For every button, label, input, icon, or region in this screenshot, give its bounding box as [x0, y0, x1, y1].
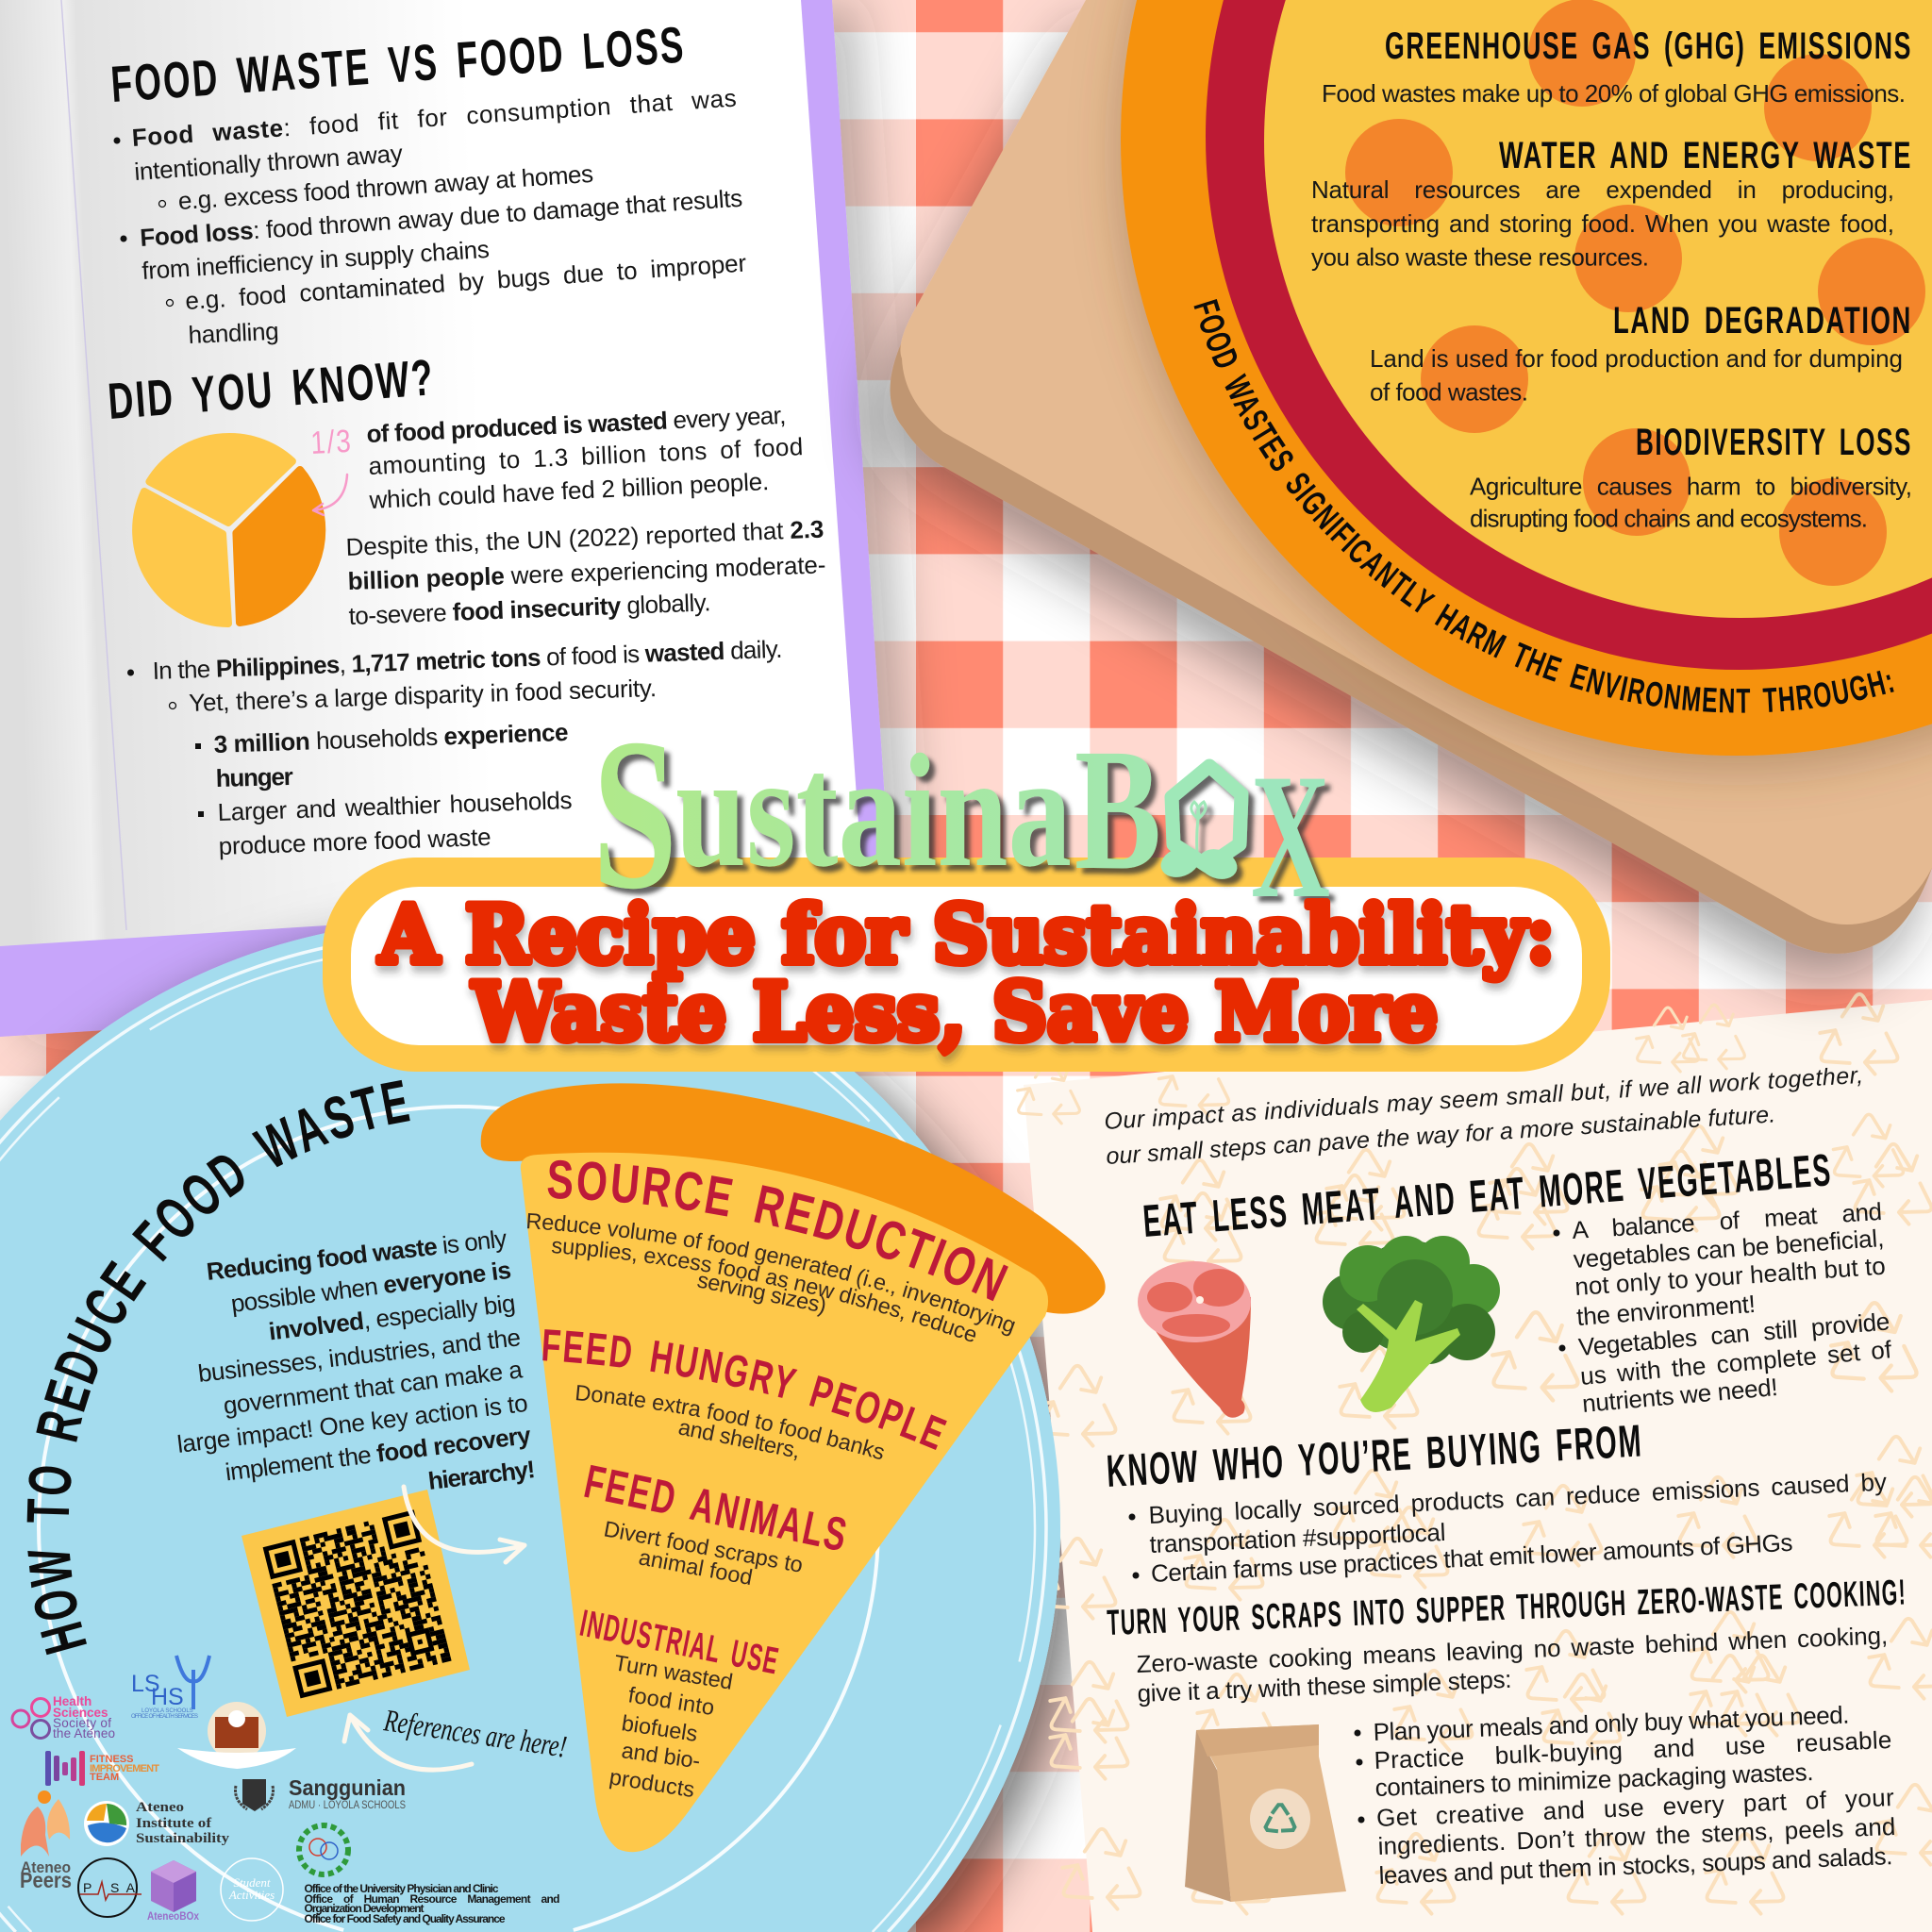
- curved heading: how to reduce food waste: HOW TO REDUCE FOOD WASTE: [26, 1079, 410, 1655]
- logo: wreath: [299, 1825, 348, 1874]
- text block: definitions: intentionally thrown away: [133, 139, 404, 186]
- text: feed animals: FEED ANIMALS: [580, 1455, 853, 1562]
- text block: sponsoring offices: Office of the University Physician and Clinic: [304, 1882, 499, 1895]
- logo: LSHS office of health services: OFFICE OF HEALTH SERVICES: [131, 1714, 198, 1720]
- logo: Ateneo Institute of Sustainability: [84, 1800, 230, 1846]
- logo: Ateneo Institute of Sustainability: Sustainability: [136, 1831, 230, 1846]
- text block: reducing food waste: involved, especially big: [267, 1289, 517, 1345]
- text block: balance bullets: not only to your health but to: [1574, 1252, 1887, 1301]
- text block: reducing food waste: large impact! One key action is to: [175, 1389, 529, 1458]
- text block: sponsoring offices: Office of Human Resource Management and: [304, 1892, 560, 1906]
- logo: Ateneo Peers: Ateneo: [21, 1859, 71, 1876]
- text block: food wasted stat: amounting to 1.3 billion tons of food: [368, 432, 804, 480]
- text block: zero-waste steps: Plan your meals and only buy what you need.: [1373, 1701, 1850, 1746]
- panel: pizza slice food recovery hierarchy: [521, 1153, 1048, 1853]
- text: source reduction: Reduce volume of food generated (i.e., inventorying: [526, 1213, 1015, 1336]
- text: industrial use: products: [608, 1764, 696, 1802]
- logo: Ateneo Institute of Sustainability: Institute of: [136, 1816, 212, 1831]
- text block: buying bullets: Buying locally sourced products can reduce emissions caused by: [1148, 1468, 1887, 1529]
- logo: fitness improvement team: [45, 1751, 159, 1786]
- text block: reducing food waste: hierarchy!: [426, 1455, 537, 1495]
- heading: did you know: DID YOU KNOW?: [106, 349, 437, 430]
- logo: SustainaBOX wordmark: S: [592, 693, 677, 934]
- text block: buying bullets: transportation #supportlocal: [1149, 1518, 1446, 1558]
- text block: definitions: [113, 84, 747, 349]
- text block: food wasted stat: which could have fed 2 billion people.: [368, 467, 770, 514]
- panel: purple backing sheet: [0, 0, 894, 1037]
- text block: definitions: from inefficiency in supply chains: [141, 235, 491, 285]
- text block: balance bullets: [1553, 1197, 1893, 1418]
- text block: food insecurity: Despite this, the UN (2022) reported that 2.3: [345, 515, 824, 561]
- logo: SustainaBOX wordmark: ustaina: [675, 722, 1072, 901]
- logo: SustainaBOX wordmark: [592, 693, 1330, 936]
- text block: food wasted stat: [366, 401, 804, 514]
- text: industrial use: [576, 1603, 783, 1802]
- pepperoni toppings: [1345, 0, 1925, 586]
- text: industrial use: biofuels: [620, 1710, 699, 1746]
- panel: wooden pizza board: [891, 0, 1932, 954]
- text block: zero-waste steps: Get creative and use every part of your: [1376, 1783, 1895, 1832]
- logo: Student Activities: Activities: [228, 1888, 275, 1902]
- text block: Philippines: 3 million households experience: [213, 718, 569, 758]
- logo: PMSA: SA: [110, 1880, 136, 1895]
- logo: Health Sciences Society: Sciences: [53, 1706, 108, 1720]
- text block: food insecurity: to-severe food insecurity globally.: [348, 588, 711, 630]
- text block: impact intro: [1104, 1062, 1864, 1170]
- text block: zero-waste steps: leaves and put them in stocks, soups and salads.: [1378, 1841, 1893, 1890]
- logo: Sanggunian: [236, 1775, 406, 1811]
- logo: SustainaBOX wordmark: B: [1074, 713, 1161, 907]
- text: biodiversity loss: disrupting food chains and ecosystems.: [1470, 504, 1868, 532]
- text block: buying bullets: Certain farms use practices that emit lower amounts of GHGs: [1150, 1528, 1793, 1588]
- text block: impact intro: Our impact as individuals may seem small but, if we all work together,: [1104, 1062, 1864, 1135]
- text block: balance bullets: the environment!: [1575, 1290, 1757, 1331]
- text: greenhouse gas: Food wastes make up to 20% of global GHG emissions.: [1322, 79, 1906, 108]
- logo: PMSA: P: [83, 1880, 92, 1895]
- text: land degradation: Land is used for food production and for dumping: [1370, 344, 1903, 373]
- caption: references are here: References are here!: [381, 1704, 569, 1765]
- text: water and energy: [1311, 135, 1912, 272]
- text: feed animals: [580, 1455, 853, 1590]
- text block: Philippines: In the Philippines, 1,717 metric tons of food is wasted daily.: [152, 635, 783, 685]
- text block: food wasted stat: of food produced is wasted every year,: [366, 401, 787, 448]
- text: feed animals: animal food: [637, 1544, 755, 1590]
- text: source reduction: SOURCE REDUCTION: [547, 1160, 1008, 1302]
- logo: Student Activities: [221, 1858, 283, 1921]
- text block: reducing food waste: government that can make a: [222, 1355, 525, 1420]
- logo: AteneoBOx cube: [147, 1860, 200, 1923]
- text: industrial use: Turn wasted: [612, 1650, 735, 1694]
- text block: sponsoring offices: Organization Development: [304, 1902, 425, 1915]
- text block: zero-waste intro: Zero-waste cooking means leaving no waste behind when cooking,: [1136, 1621, 1889, 1678]
- logo: Sanggunian: Sanggunian: [289, 1775, 406, 1800]
- text block: reducing food waste: [175, 1224, 537, 1495]
- text block: Philippines: Larger and wealthier households: [217, 786, 573, 826]
- text block: definitions: e.g. excess food thrown away at homes: [177, 159, 594, 215]
- icon: paper bag with recycle mark: [1185, 1724, 1346, 1902]
- logo: SustainaBOX wordmark: X: [1251, 738, 1330, 936]
- text: industrial use: INDUSTRIAL USE: [576, 1603, 783, 1683]
- arrow: to QR code: [344, 1715, 472, 1770]
- text block: Philippines: [127, 635, 783, 860]
- text block: balance bullets: Vegetables can still provide: [1577, 1307, 1890, 1361]
- text block: zero-waste steps: containers to minimize packaging wastes.: [1374, 1757, 1814, 1802]
- text block: definitions: e.g. food contaminated by bugs due to improper: [184, 248, 747, 315]
- text block: reducing food waste: implement the food recovery: [224, 1421, 533, 1486]
- logo: fitness improvement team: FITNESS: [90, 1754, 133, 1765]
- icon: meat: [1138, 1261, 1251, 1418]
- logo: Health Sciences Society: [12, 1694, 115, 1740]
- text: land degradation: [1370, 300, 1912, 406]
- title: a recipe for sustainability: [378, 888, 1555, 1058]
- text block: zero-waste steps: ingredients. Don’t throw the stems, peels and: [1377, 1812, 1896, 1860]
- text block: reducing food waste: possible when everyone is: [229, 1256, 513, 1318]
- logo: LSHS office of health services: [131, 1656, 209, 1720]
- logo: Ateneo Institute of Sustainability: Ateneo: [136, 1800, 184, 1815]
- text: biodiversity loss: [1470, 422, 1912, 532]
- text block: definitions: Food loss: food thrown away due to damage that results: [139, 184, 743, 252]
- blue plate cast shadow: [0, 920, 1060, 1932]
- logo: LSHS office of health services: LOYOLA SCHOOLS: [142, 1708, 193, 1714]
- text: water and energy: you also waste these resources.: [1311, 243, 1649, 272]
- text: source reduction: supplies, excess food as new dishes, reduce: [551, 1241, 975, 1341]
- logo: Ateneo Peers: Peers: [20, 1868, 72, 1892]
- text block: definitions: handling: [188, 317, 279, 349]
- text: biodiversity loss: Agriculture causes harm to biodiversity,: [1470, 472, 1912, 500]
- chart: one third pie: [136, 437, 322, 624]
- logo: school seal: [177, 1702, 296, 1769]
- logo: fitness improvement team: TEAM: [90, 1772, 119, 1783]
- text block: balance bullets: nutrients we need!: [1581, 1373, 1779, 1418]
- icon: pink arrow: [313, 475, 347, 515]
- text block: reducing food waste: Reducing food waste is only: [205, 1224, 508, 1286]
- text block: impact intro: our small steps can pave the way for a more sustainable future.: [1106, 1101, 1776, 1170]
- text block: zero-waste steps: [1355, 1701, 1896, 1890]
- text: source reduction: serving sizes): [695, 1267, 828, 1318]
- text block: sponsoring offices: Office for Food Safety and Quality Assurance: [304, 1912, 506, 1925]
- text block: definitions: Food waste: food fit for consumption that was: [131, 84, 737, 152]
- text: industrial use: and bio-: [620, 1738, 702, 1774]
- logo: Health Sciences Society: Society of: [53, 1716, 111, 1730]
- text block: buying bullets: [1128, 1468, 1887, 1588]
- text: feed hungry people: Donate extra food to food banks: [575, 1385, 884, 1459]
- text: land degradation: of food wastes.: [1370, 377, 1528, 406]
- logo: Student Activities: Student: [234, 1875, 271, 1890]
- panel: title banner: [323, 858, 1610, 1072]
- text block: balance bullets: A balance of meat and: [1572, 1197, 1883, 1244]
- panel: blue plate: [0, 933, 1106, 1932]
- logo: Health Sciences Society: Health: [53, 1694, 92, 1708]
- logo: AteneoBOx cube: AteneoBOx: [147, 1911, 200, 1923]
- logo: Health Sciences Society: the Ateneo: [53, 1726, 115, 1740]
- arrow: to pizza slice: [404, 1487, 525, 1562]
- text: greenhouse gas: [1322, 25, 1912, 108]
- icon: QR code: [242, 1490, 470, 1717]
- logo: Sanggunian: ADMU · LOYOLA SCHOOLS: [289, 1800, 406, 1811]
- logo: PMSA: [78, 1858, 142, 1917]
- title: a recipe for sustainability: A Recipe for Sustainability:: [378, 888, 1555, 981]
- text block: balance bullets: us with the complete set of: [1579, 1335, 1893, 1391]
- text: water and energy: Natural resources are expended in producing,: [1311, 175, 1894, 204]
- panel: food waste vs food loss paper: [0, 0, 863, 946]
- heading: food waste vs food loss: FOOD WASTE VS FOOD LOSS: [109, 17, 687, 113]
- label: one third: 1/3: [309, 424, 353, 461]
- text: feed hungry people: FEED HUNGRY PEOPLE: [542, 1329, 947, 1450]
- logo: LSHS office of health services: LS: [131, 1671, 160, 1697]
- title: a recipe for sustainability: Waste Less, Save More: [472, 965, 1438, 1058]
- text: water and energy: transporting and storing food. When you waste food,: [1311, 209, 1894, 238]
- pizza slice: crust: [481, 1083, 1106, 1314]
- text block: zero-waste steps: Practice bulk-buying and use reusable: [1374, 1725, 1892, 1774]
- icon: broccoli: [1323, 1236, 1500, 1412]
- logo: LSHS office of health services: HS: [151, 1684, 184, 1710]
- text block: Philippines: Yet, there’s a large disparity in food security.: [189, 674, 657, 717]
- logo: fitness improvement team: IMPROVEMENT: [90, 1763, 159, 1774]
- text block: balance bullets: vegetables can be beneficial,: [1573, 1224, 1885, 1274]
- text: feed animals: Divert food scraps to: [602, 1516, 805, 1577]
- text: feed hungry people: and shelters,: [676, 1414, 803, 1463]
- text block: food insecurity: billion people were experiencing moderate-: [347, 550, 826, 595]
- panel: beige action sheet: [1009, 994, 1932, 1932]
- text block: sponsoring offices: [304, 1882, 560, 1925]
- text block: Philippines: hunger: [215, 762, 293, 792]
- text block: zero-waste intro: give it a try with these simple steps:: [1137, 1665, 1512, 1707]
- curved ring text: FOOD WASTES SIGNIFICANTLY HARM THE ENVIRONMENT THROUGH:: [1194, 299, 1894, 713]
- text block: food insecurity: [345, 515, 826, 630]
- text block: reducing food waste: businesses, industries, and the: [196, 1323, 522, 1388]
- panel: pizza with environmental harms: [1098, 0, 1932, 792]
- text block: zero-waste intro: [1136, 1621, 1889, 1707]
- logo: Ateneo Peers: [20, 1790, 72, 1892]
- text: industrial use: food into: [626, 1682, 716, 1720]
- text block: Philippines: produce more food waste: [218, 823, 491, 860]
